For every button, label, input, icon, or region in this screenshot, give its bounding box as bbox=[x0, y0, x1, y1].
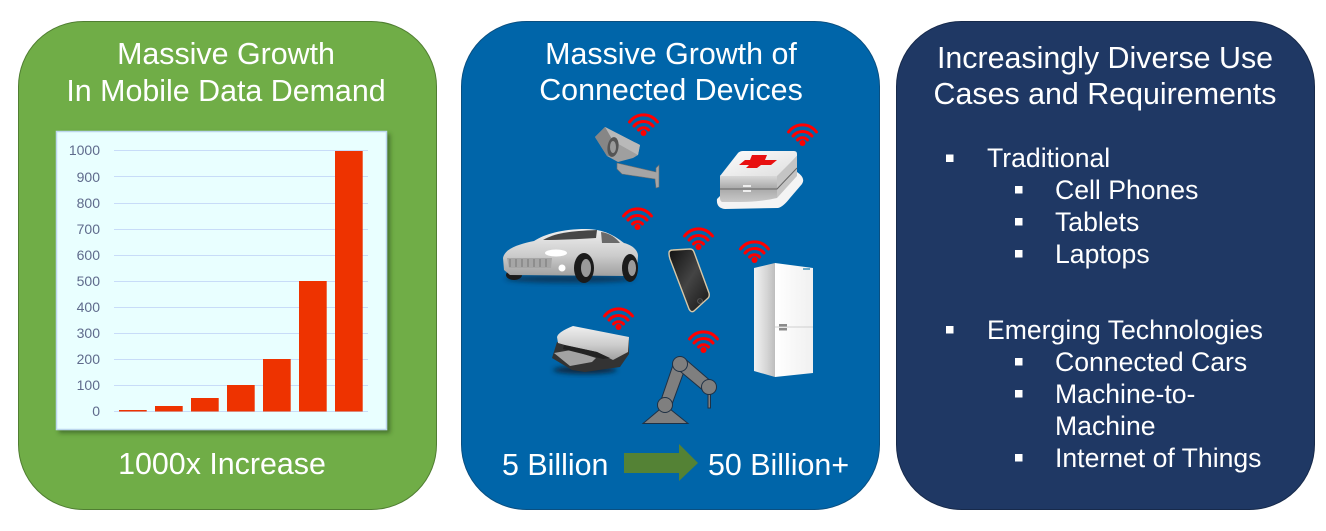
heading: massive growth of connected devices: Connected Devices bbox=[539, 73, 803, 107]
icon: security camera bbox=[595, 127, 659, 188]
icon: printer bbox=[552, 326, 629, 374]
icon: wifi phone bbox=[684, 229, 712, 250]
bar chart: 1000x growth: 500 bbox=[77, 273, 100, 289]
icon: wifi car bbox=[624, 209, 652, 230]
icon: robot arm bbox=[643, 356, 716, 424]
list: traditional: Traditional bbox=[987, 143, 1110, 173]
bar chart: 1000x growth: 700 bbox=[77, 221, 100, 237]
bar chart: 1000x growth: 1000 bbox=[69, 142, 100, 158]
icon: car bbox=[503, 229, 638, 283]
icon: wifi medical kit bbox=[788, 125, 816, 146]
caption: 1000x increase: 1000x Increase bbox=[118, 447, 326, 481]
bar chart: 1000x growth: 400 bbox=[77, 299, 100, 315]
list: emerging technologies: Emerging Technologies bbox=[987, 315, 1263, 345]
list: emerging technologies: Machine bbox=[1055, 411, 1156, 441]
icon: medical kit bbox=[717, 151, 803, 209]
bar chart: 1000x growth: 0 bbox=[92, 403, 100, 419]
heading: massive growth in mobile data demand: In Mobile Data Demand bbox=[66, 74, 386, 108]
list: emerging technologies bbox=[946, 315, 1263, 473]
panel: mobile data demand bbox=[18, 22, 436, 510]
heading: increasingly diverse use cases: Increasingly Diverse Use bbox=[937, 41, 1273, 75]
label: 5 billion: 5 Billion bbox=[502, 448, 608, 482]
icon: smartphone bbox=[669, 249, 709, 312]
list: emerging technologies: Internet of Things bbox=[1055, 443, 1261, 473]
list: emerging technologies: Connected Cars bbox=[1055, 347, 1247, 377]
heading: increasingly diverse use cases: Cases and Requirements bbox=[934, 77, 1276, 111]
list: traditional: Laptops bbox=[1055, 239, 1150, 269]
icon: wifi printer bbox=[604, 309, 632, 330]
bar chart: 1000x growth: 800 bbox=[77, 195, 100, 211]
list: emerging technologies: Machine-to- bbox=[1055, 379, 1195, 409]
list: traditional: Cell Phones bbox=[1055, 175, 1198, 205]
bar chart: 1000x growth: 200 bbox=[77, 351, 100, 367]
icon: refrigerator bbox=[754, 263, 813, 377]
bar chart: 1000x growth: 900 bbox=[77, 169, 100, 185]
icon: wifi robot bbox=[690, 332, 718, 353]
panel: use cases and requirements bbox=[896, 22, 1314, 510]
list: traditional: Tablets bbox=[1055, 207, 1139, 237]
arrow: growth bbox=[624, 444, 698, 481]
icon: wifi camera bbox=[630, 115, 658, 136]
bar chart: 1000x growth bbox=[56, 132, 386, 430]
panel: connected devices bbox=[462, 22, 880, 510]
label: 50 billion+: 50 Billion+ bbox=[708, 448, 849, 482]
heading: massive growth in mobile data demand: Massive Growth bbox=[117, 37, 335, 71]
heading: massive growth of connected devices: Massive Growth of bbox=[545, 37, 797, 71]
bar chart: 1000x growth: 600 bbox=[77, 247, 100, 263]
list: traditional bbox=[946, 143, 1198, 269]
bar chart: 1000x growth: 300 bbox=[77, 325, 100, 341]
bar chart: 1000x growth: 100 bbox=[77, 377, 100, 393]
icon: wifi refrigerator bbox=[740, 242, 768, 263]
